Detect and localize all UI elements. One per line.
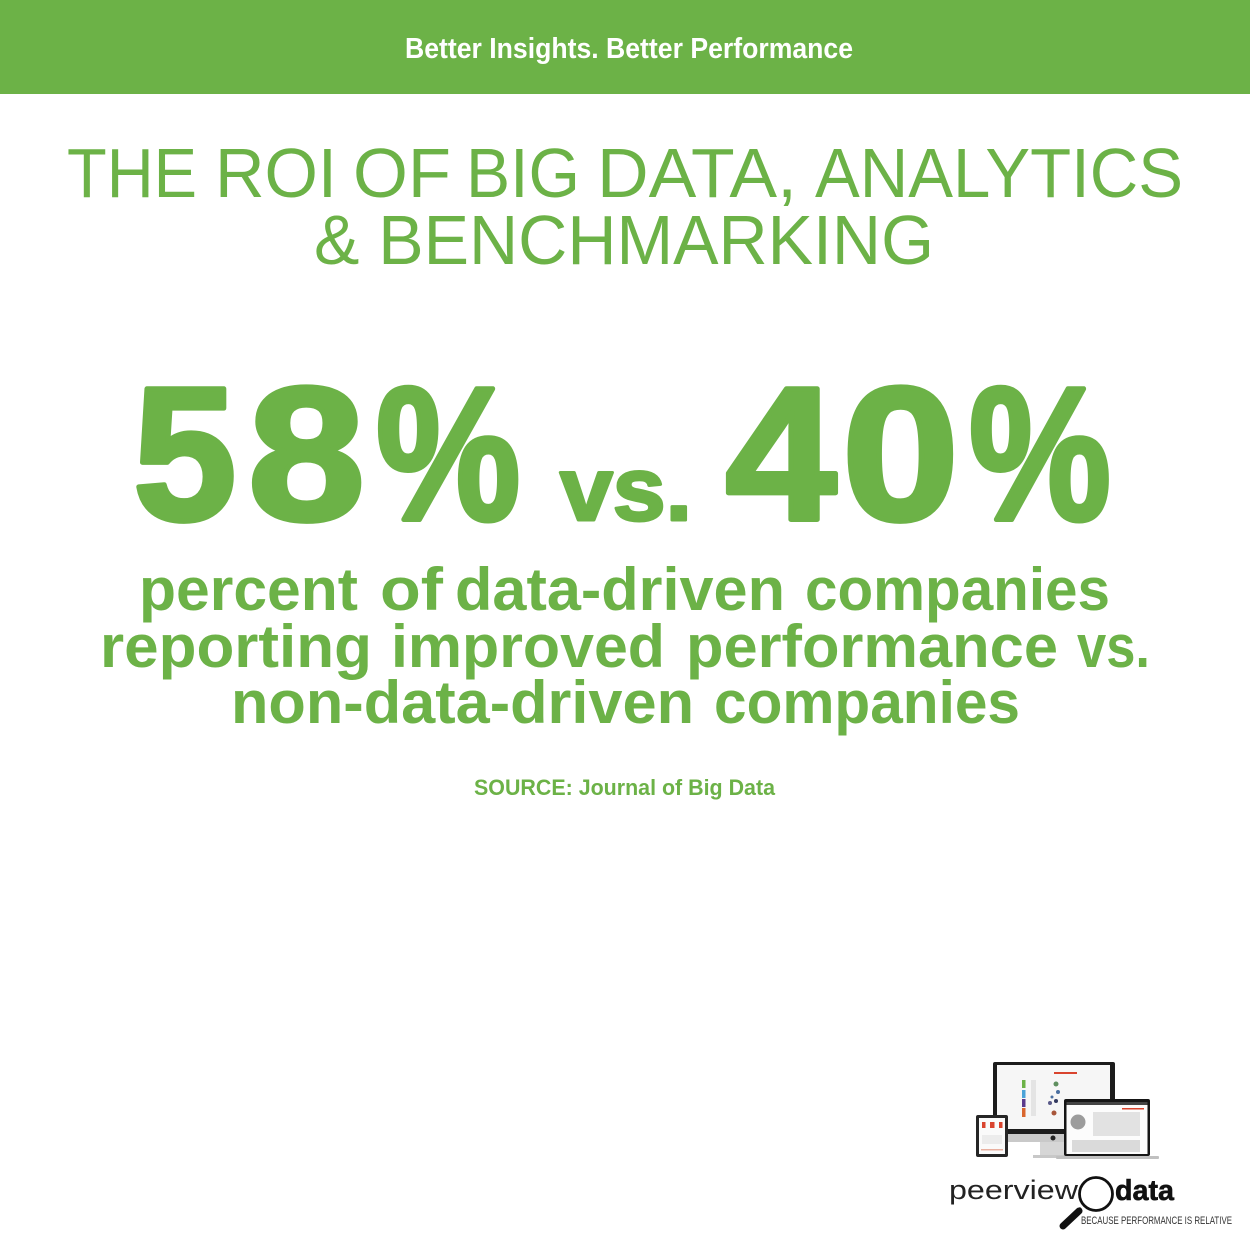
big statistic: 58% vs. 40%: 0 [842,348,959,560]
big statistic: 58% vs. 40%: 4 [726,348,836,560]
icon: magnifying glass [1063,1178,1112,1226]
title: DATA, [597,134,797,212]
header banner: Better Insights. Better Performance [405,33,853,65]
description text: companies [805,556,1110,623]
big statistic: 58% vs. 40%: vs. [560,440,692,540]
title: & BENCHMARKING [314,201,934,279]
description text: of [380,556,444,623]
description text: performance [686,613,1058,680]
logo: peerview data: data [1115,1175,1175,1207]
logo: peerview data: peerview [949,1175,1079,1205]
title [67,134,1183,279]
description text: percent [139,556,358,623]
description text: improved [391,613,665,680]
title: ROI [215,134,337,212]
big statistic: 58% vs. 40%: 5 [133,348,236,560]
source note: SOURCE: Journal of Big Data [474,775,776,800]
description text: non-data-driven [231,669,694,736]
description text: companies [714,669,1020,736]
description text: data-driven [455,556,785,623]
big statistic: 58% vs. 40%: 8 [248,348,365,560]
big statistic: 58% vs. 40% [133,348,1111,560]
title: THE [67,134,197,212]
icon: tablet [976,1115,1008,1157]
icon: desktop monitor [993,1062,1115,1158]
big statistic: 58% vs. 40%: % [969,348,1111,560]
title: ANALYTICS [815,134,1183,212]
description text: vs. [1077,613,1150,680]
description text [100,556,1150,736]
header banner [0,0,1250,94]
device illustration [976,1062,1159,1159]
description text: reporting [100,613,372,680]
title: BIG [466,134,580,212]
logo: peerview data [949,1175,1232,1227]
icon: laptop [1056,1099,1159,1159]
big statistic: 58% vs. 40%: % [376,348,520,560]
title: OF [353,134,451,212]
